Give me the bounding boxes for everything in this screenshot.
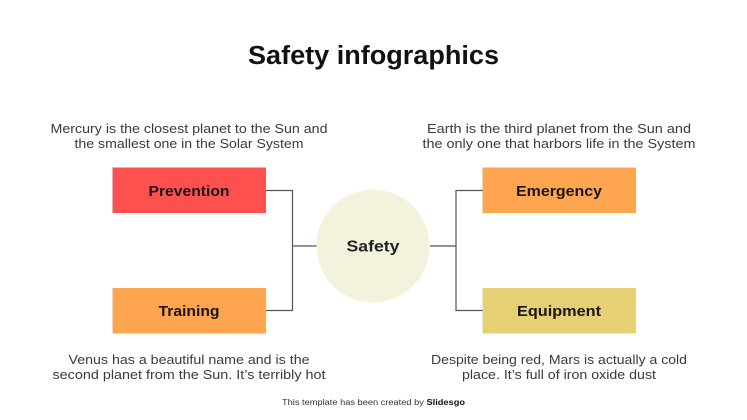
- panel: Emergency: Emergency: [516, 183, 603, 200]
- text: Earth description: the only one that harbors life in the System: [422, 136, 696, 151]
- text: Venus description: second planet from the Sun. It’s terribly hot: [52, 367, 326, 382]
- central circle: Safety: Safety: [346, 238, 400, 256]
- text: Earth description: Earth is the third planet from the Sun and: [427, 121, 691, 136]
- panel: Equipment: [482, 288, 636, 334]
- panel: Training: Training: [158, 303, 220, 320]
- footer credit: This template has been created by Slidesgo: [282, 398, 465, 407]
- text: Mercury description: [50, 121, 328, 151]
- panel: Equipment: Equipment: [517, 303, 601, 320]
- panel: Training: [112, 288, 266, 334]
- text: Earth description: [422, 121, 696, 151]
- text: Mars description: [431, 352, 687, 382]
- text: Mars description: place. It’s full of iron oxide dust: [462, 367, 656, 382]
- text: Venus description: Venus has a beautiful name and is the: [68, 352, 310, 367]
- panel: Prevention: Prevention: [148, 183, 230, 200]
- panel: Prevention: [112, 168, 266, 213]
- central circle: Safety: [316, 190, 430, 302]
- text: Mercury description: the smallest one in the Solar System: [74, 136, 304, 151]
- text: Mars description: Despite being red, Mars is actually a cold: [431, 352, 687, 367]
- connector lines: [266, 190, 482, 310]
- text: Mercury description: Mercury is the closest planet to the Sun and: [50, 121, 328, 136]
- text: Venus description: [52, 352, 326, 382]
- panel: Emergency: [482, 168, 636, 213]
- title: Safety infographics: [248, 42, 499, 70]
